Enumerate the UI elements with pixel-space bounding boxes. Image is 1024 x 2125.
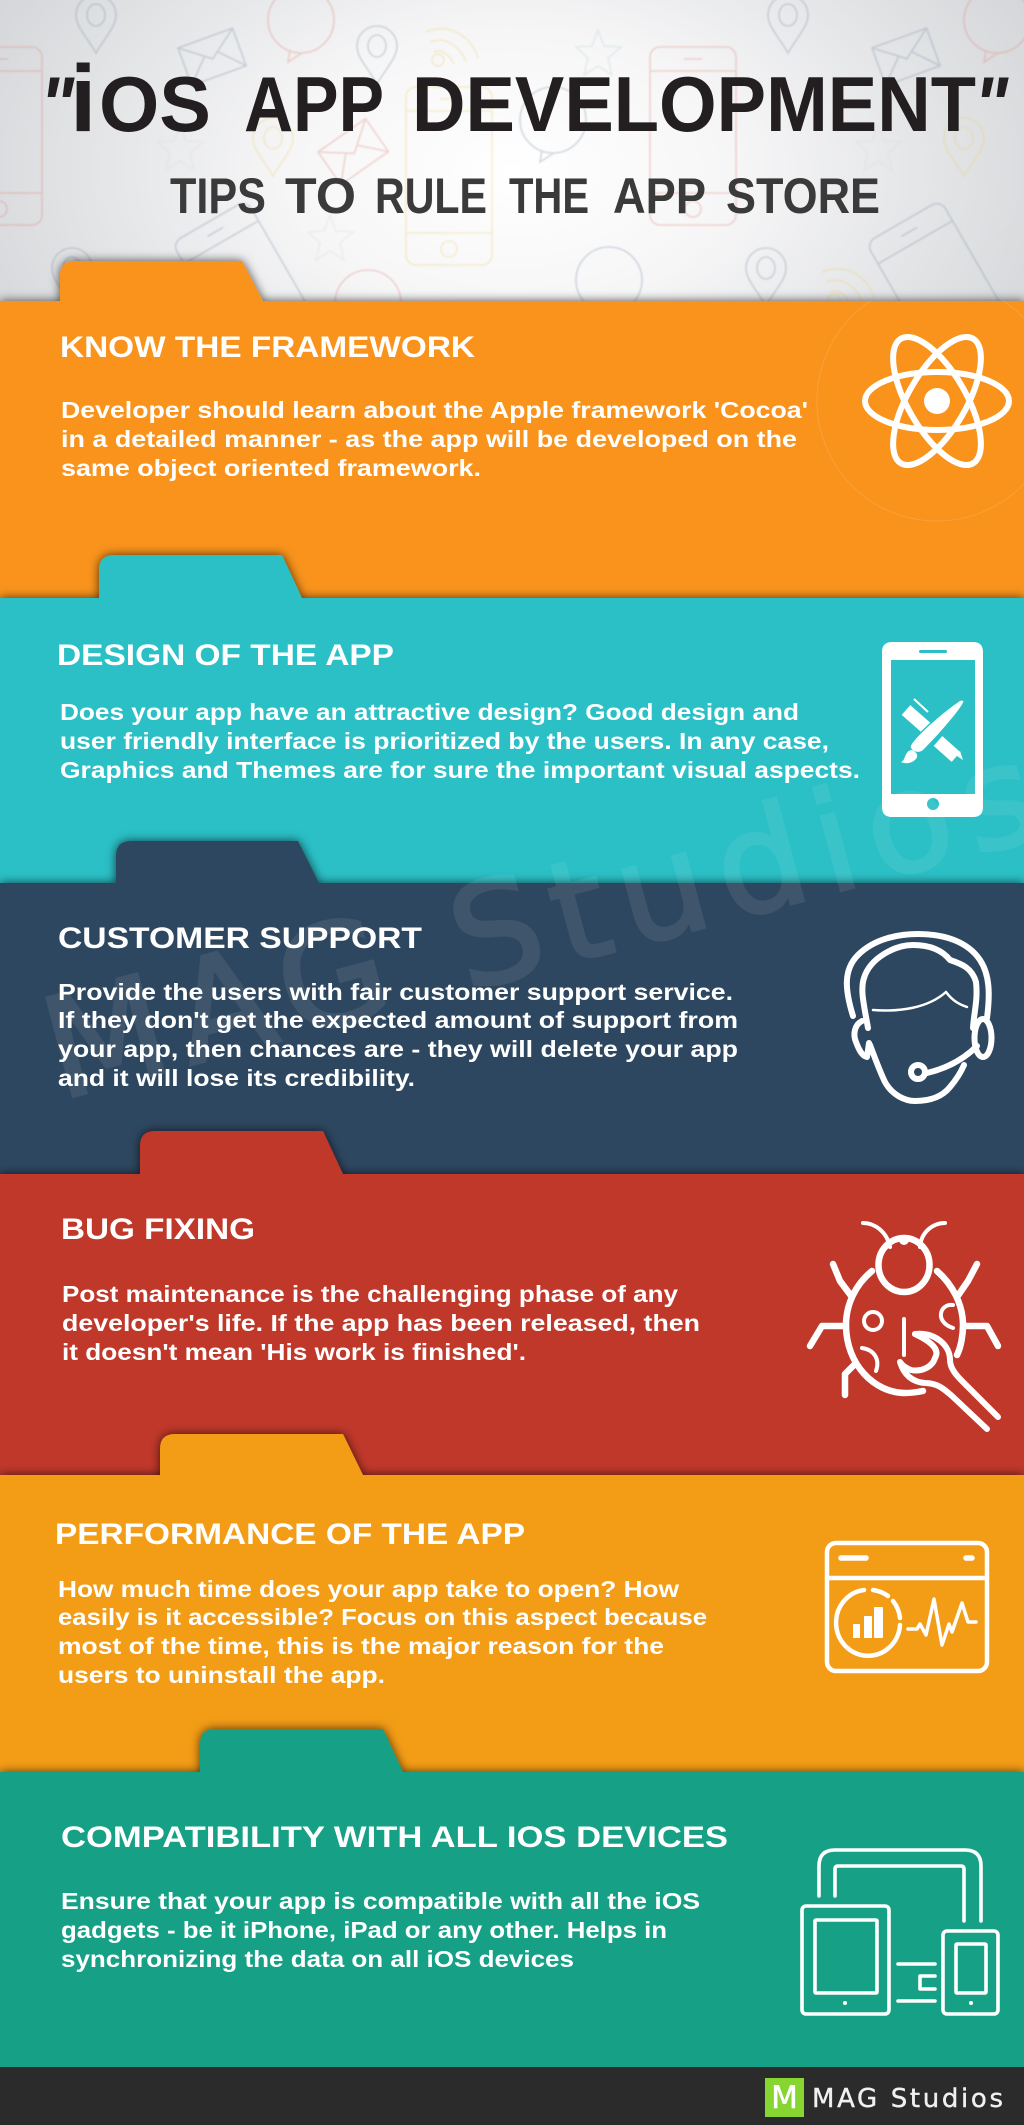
subtitle: THE	[509, 168, 589, 224]
title: OS	[99, 60, 211, 148]
text: customer support	[58, 979, 738, 1091]
subtitle: TIPS	[170, 168, 266, 224]
panel: know the framework	[0, 261, 1024, 598]
text: bug fixing	[62, 1281, 700, 1365]
watermark: MAG Studios: MAG Studios	[27, 711, 1024, 1133]
text: compatibility	[61, 1888, 700, 1972]
subtitle: TO	[285, 168, 356, 224]
text: design of the app: Graphics and Themes are for sure the important visual aspects.	[60, 757, 860, 783]
icon: performance dashboard	[827, 1543, 987, 1671]
icon: connected devices	[802, 1850, 998, 2014]
text: customer support: If they don't get the expected amount of support from	[58, 1007, 738, 1033]
panel: compatibility with all iOS devices	[0, 1729, 1024, 2067]
heading: know the framework: KNOW THE FRAMEWORK	[60, 331, 475, 364]
heading: performance of the app: PERFORMANCE OF THE APP	[55, 1518, 525, 1551]
header background	[0, 0, 1024, 397]
logo: MAG Studios: M	[771, 2080, 798, 2116]
text: design of the app: Does your app have an attractive design? Good design and	[60, 699, 799, 725]
footer bar	[0, 2067, 1024, 2125]
icon: phone with brush and pencil	[882, 642, 983, 817]
text: know the framework: in a detailed manner - as the app will be developed on the	[61, 426, 797, 452]
subtitle: APP	[613, 168, 706, 224]
panel: performance of the app	[0, 1434, 1024, 1772]
subtitle: STORE	[726, 168, 880, 224]
title: DEVELOPMENT	[412, 60, 976, 148]
text: design of the app: user friendly interface is prioritized by the users. In any case,	[60, 728, 829, 754]
text: compatibility: synchronizing the data on all iOS devices	[61, 1946, 574, 1972]
subtitle	[170, 168, 880, 224]
brand name: MAG Studios	[812, 2084, 1003, 2114]
heading: customer support: CUSTOMER SUPPORT	[58, 922, 422, 955]
text: compatibility: gadgets - be it iPhone, iPad or any other. Helps in	[61, 1917, 667, 1943]
title: APP	[244, 60, 384, 148]
logo: MAG Studios	[765, 2078, 804, 2117]
title: "	[974, 60, 1009, 148]
text: bug fixing: developer's life. If the app has been released, then	[62, 1310, 700, 1336]
text: compatibility: Ensure that your app is compatible with all the iOS	[61, 1888, 700, 1914]
panel: design of the app	[0, 555, 1024, 884]
text: performance of the app: most of the time, this is the major reason for the	[58, 1633, 664, 1659]
icon: support agent headset	[847, 934, 992, 1101]
panel: bug fixing	[0, 1131, 1024, 1475]
subtitle: RULE	[375, 168, 487, 224]
text: performance of the app: easily is it accessible? Focus on this aspect because	[58, 1604, 707, 1630]
text: bug fixing: Post maintenance is the challenging phase of any	[62, 1281, 678, 1307]
text: performance of the app: How much time does your app take to open? How	[58, 1576, 679, 1602]
text: know the framework	[61, 397, 808, 481]
icon: bug with wrench	[810, 1223, 998, 1429]
title: i	[70, 46, 96, 152]
faded app icon pattern	[0, 0, 1024, 397]
heading: design of the app: DESIGN OF THE APP	[57, 639, 394, 672]
icon: atom	[865, 324, 1009, 478]
text: performance of the app: users to uninstall the app.	[58, 1662, 385, 1688]
title	[40, 46, 1009, 152]
text: customer support: your app, then chances are - they will delete your app	[58, 1036, 738, 1062]
text: know the framework: same object oriented framework.	[61, 455, 481, 481]
heading: compatibility: COMPATIBILITY WITH ALL IOS DEVICES	[61, 1821, 728, 1854]
text: customer support: and it will lose its credibility.	[58, 1065, 415, 1091]
text: customer support: Provide the users with fair customer support service.	[58, 979, 733, 1005]
panel: customer support	[0, 711, 1024, 1175]
text: design of the app	[60, 699, 860, 783]
text: bug fixing: it doesn't mean 'His work is finished'.	[62, 1339, 526, 1365]
title: "	[40, 60, 75, 148]
text: know the framework: Developer should learn about the Apple framework 'Cocoa'	[61, 397, 808, 423]
text: performance of the app	[58, 1576, 707, 1688]
heading: bug fixing: BUG FIXING	[61, 1213, 255, 1246]
